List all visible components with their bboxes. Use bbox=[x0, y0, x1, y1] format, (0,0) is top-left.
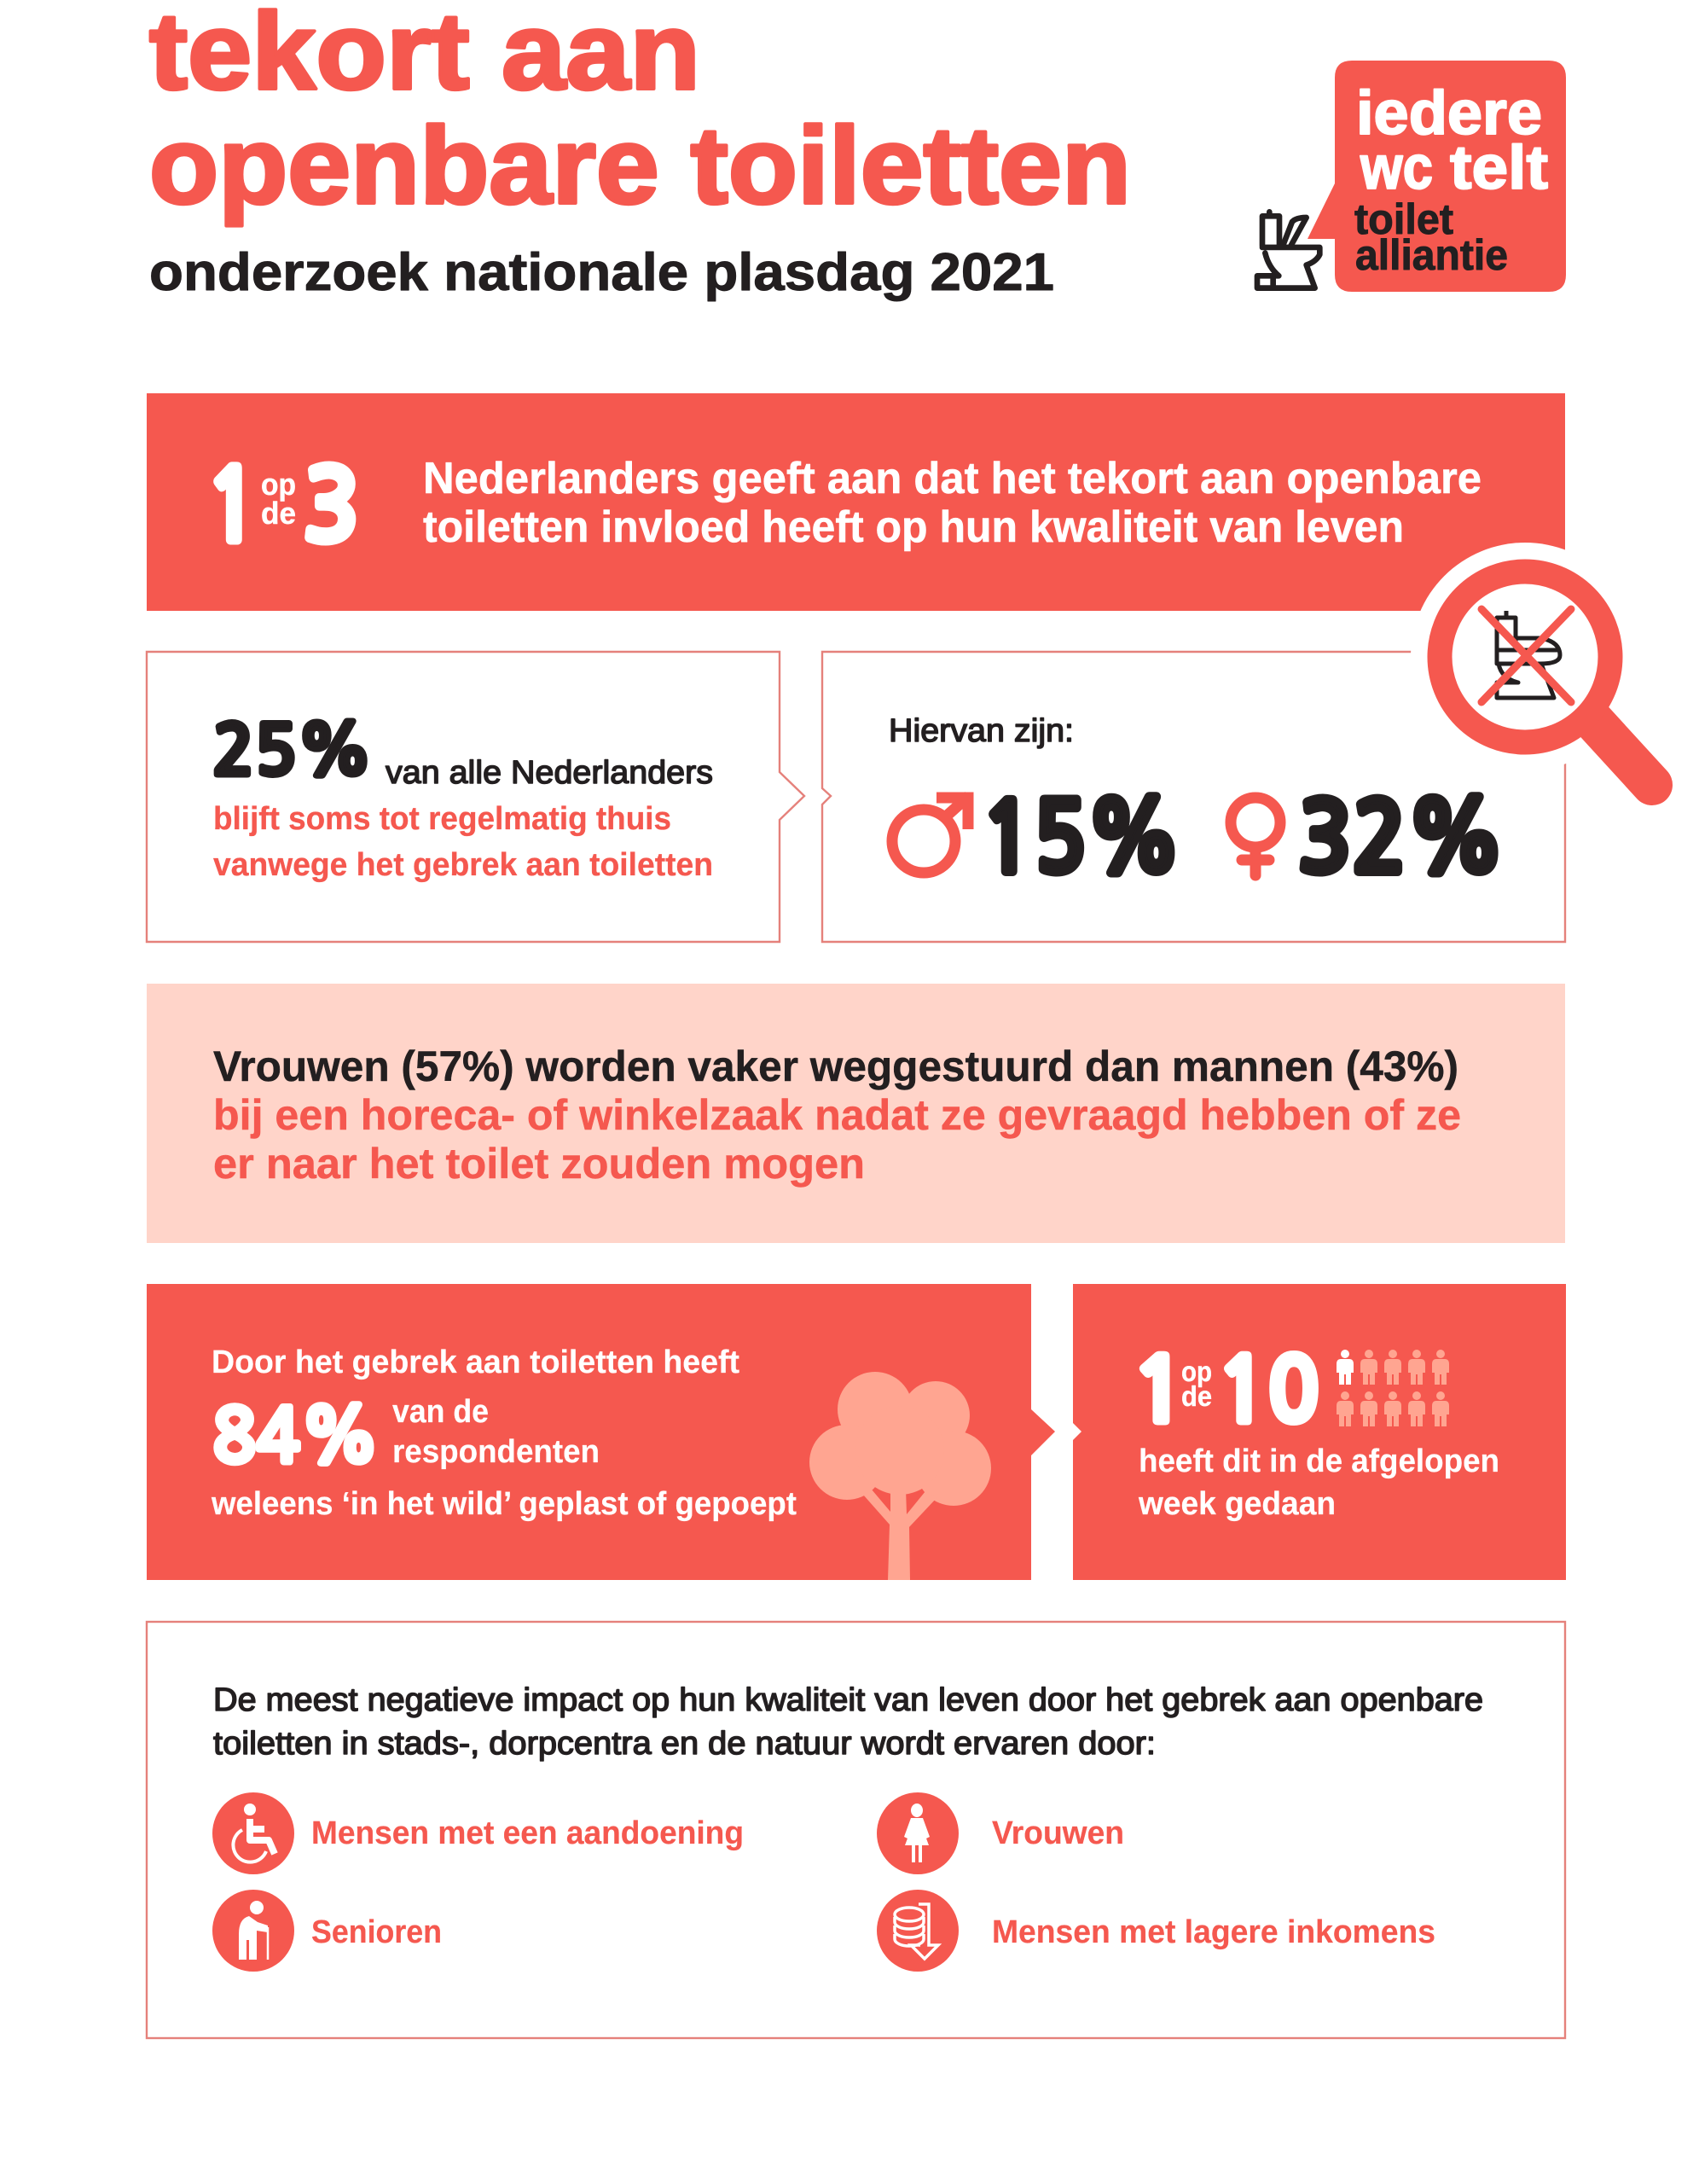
icon: wheelchair bbox=[212, 1792, 294, 1874]
stat: 1 op de 3: 1 bbox=[206, 457, 258, 556]
stat: 1 op de 10 bbox=[1131, 1348, 1319, 1435]
stat: 25%: 25% bbox=[212, 717, 373, 786]
text: van de respondenten: respondenten bbox=[392, 1434, 600, 1470]
icon: logo toilet bbox=[1257, 212, 1319, 288]
text: line dark: Vrouwen (57%) worden vaker weggestuurd dan mannen (43%) bbox=[213, 1043, 1458, 1090]
stat: 1 op de 10: 1 bbox=[1131, 1348, 1187, 1435]
text: Hiervan zijn: Hiervan zijn: bbox=[889, 713, 1074, 749]
logo text: alliantie bbox=[1355, 231, 1508, 279]
text: van de respondenten: van de bbox=[392, 1394, 489, 1430]
text: impact intro: De meest negatieve impact op hun kwaliteit van leven door het gebrek aan openbare bbox=[213, 1682, 1483, 1718]
text: lines red: bij een horeca- of winkelzaak nadat ze gevraagd hebben of ze bbox=[213, 1091, 1461, 1139]
icon: female symbol bbox=[1231, 798, 1280, 875]
stat: 1 op de 3: op bbox=[261, 467, 296, 502]
panel: vrouwen vs mannen bbox=[147, 984, 1565, 1243]
logo speech bubble bbox=[1308, 61, 1566, 292]
label: senioren: Senioren bbox=[311, 1914, 442, 1950]
stat: 1 op de 3: de bbox=[261, 496, 296, 531]
logo text: toilet bbox=[1354, 195, 1453, 243]
label: vrouwen: Vrouwen bbox=[992, 1815, 1124, 1851]
text: van alle Nederlanders: van alle Nederlanders bbox=[386, 755, 713, 791]
icon: toilet bbox=[1497, 611, 1560, 698]
panel: 1 op de 10 bbox=[1073, 1284, 1566, 1580]
icon: people 1 of 10 bbox=[1337, 1350, 1449, 1426]
logo: iedere wc telt bbox=[1257, 61, 1566, 292]
text: van de respondenten bbox=[392, 1394, 600, 1470]
stat: 1 op de 10: de bbox=[1181, 1380, 1212, 1412]
stat: 1 op de 10: op bbox=[1181, 1356, 1212, 1387]
icon: magnifying glass with crossed toilet bbox=[1411, 543, 1652, 785]
stat: 84%: 84% bbox=[212, 1400, 380, 1473]
stat: 15%: 15% bbox=[981, 791, 1181, 886]
title bbox=[149, 0, 1131, 227]
banner text: toiletten invloed heeft op hun kwaliteit van leven bbox=[423, 502, 1404, 552]
panel: 25% box bbox=[147, 652, 804, 942]
text: impact intro bbox=[213, 1682, 1483, 1762]
banner text bbox=[423, 454, 1482, 552]
text: impact intro: toiletten in stads-, dorpcentra en de natuur wordt ervaren door: bbox=[213, 1726, 1156, 1762]
text: lines red: er naar het toilet zouden mogen bbox=[213, 1140, 865, 1188]
logo text: wc bbox=[1360, 134, 1433, 202]
icon: senior with cane bbox=[212, 1890, 294, 1972]
text: door het gebrek: Door het gebrek aan toiletten heeft bbox=[212, 1345, 739, 1380]
icon: tree bbox=[809, 1372, 991, 1580]
panel: negatieve impact bbox=[147, 1622, 1565, 2038]
text: blijft soms thuis: blijft soms tot regelmatig thuis bbox=[213, 801, 671, 837]
text: blijft soms thuis: vanwege het gebrek aan toiletten bbox=[213, 847, 713, 883]
panel: 84% in het wild bbox=[147, 1284, 1055, 1580]
panel: gender box bbox=[822, 652, 1565, 942]
logo text: telt bbox=[1450, 134, 1548, 202]
logo text: iedere bbox=[1356, 79, 1542, 148]
stat: 32%: 32% bbox=[1298, 791, 1505, 886]
label: mensen met een aandoening: Mensen met een aandoening bbox=[311, 1815, 744, 1851]
title: openbare toiletten bbox=[149, 105, 1131, 227]
label: mensen met lagere inkomens: Mensen met lagere inkomens bbox=[992, 1914, 1435, 1950]
text: blijft soms thuis bbox=[213, 801, 713, 883]
cross bbox=[1482, 609, 1571, 702]
logo text bbox=[1354, 79, 1548, 279]
icon: woman bbox=[877, 1792, 959, 1874]
panel: 1 op de 3 banner bbox=[147, 393, 1565, 611]
stat: 1 op de 3 bbox=[206, 457, 360, 556]
text: lines red bbox=[213, 1091, 1461, 1188]
icon: coins down bbox=[877, 1890, 959, 1972]
stat: 1 op de 3: 3 bbox=[303, 457, 360, 556]
text: heeft dit gedaan: heeft dit in de afgelopen bbox=[1139, 1443, 1499, 1479]
stat: 1 op de 10: 10 bbox=[1216, 1348, 1319, 1435]
banner text: Nederlanders geeft aan dat het tekort aan openbare bbox=[423, 454, 1482, 503]
text: weleens in het wild: weleens ‘in het wild’ geplast of gepoept bbox=[211, 1486, 797, 1522]
icon: male symbol bbox=[892, 796, 969, 873]
subtitle: onderzoek nationale plasdag 2021 bbox=[149, 243, 1054, 302]
text: heeft dit gedaan: week gedaan bbox=[1138, 1486, 1336, 1522]
text: heeft dit gedaan bbox=[1138, 1443, 1499, 1522]
